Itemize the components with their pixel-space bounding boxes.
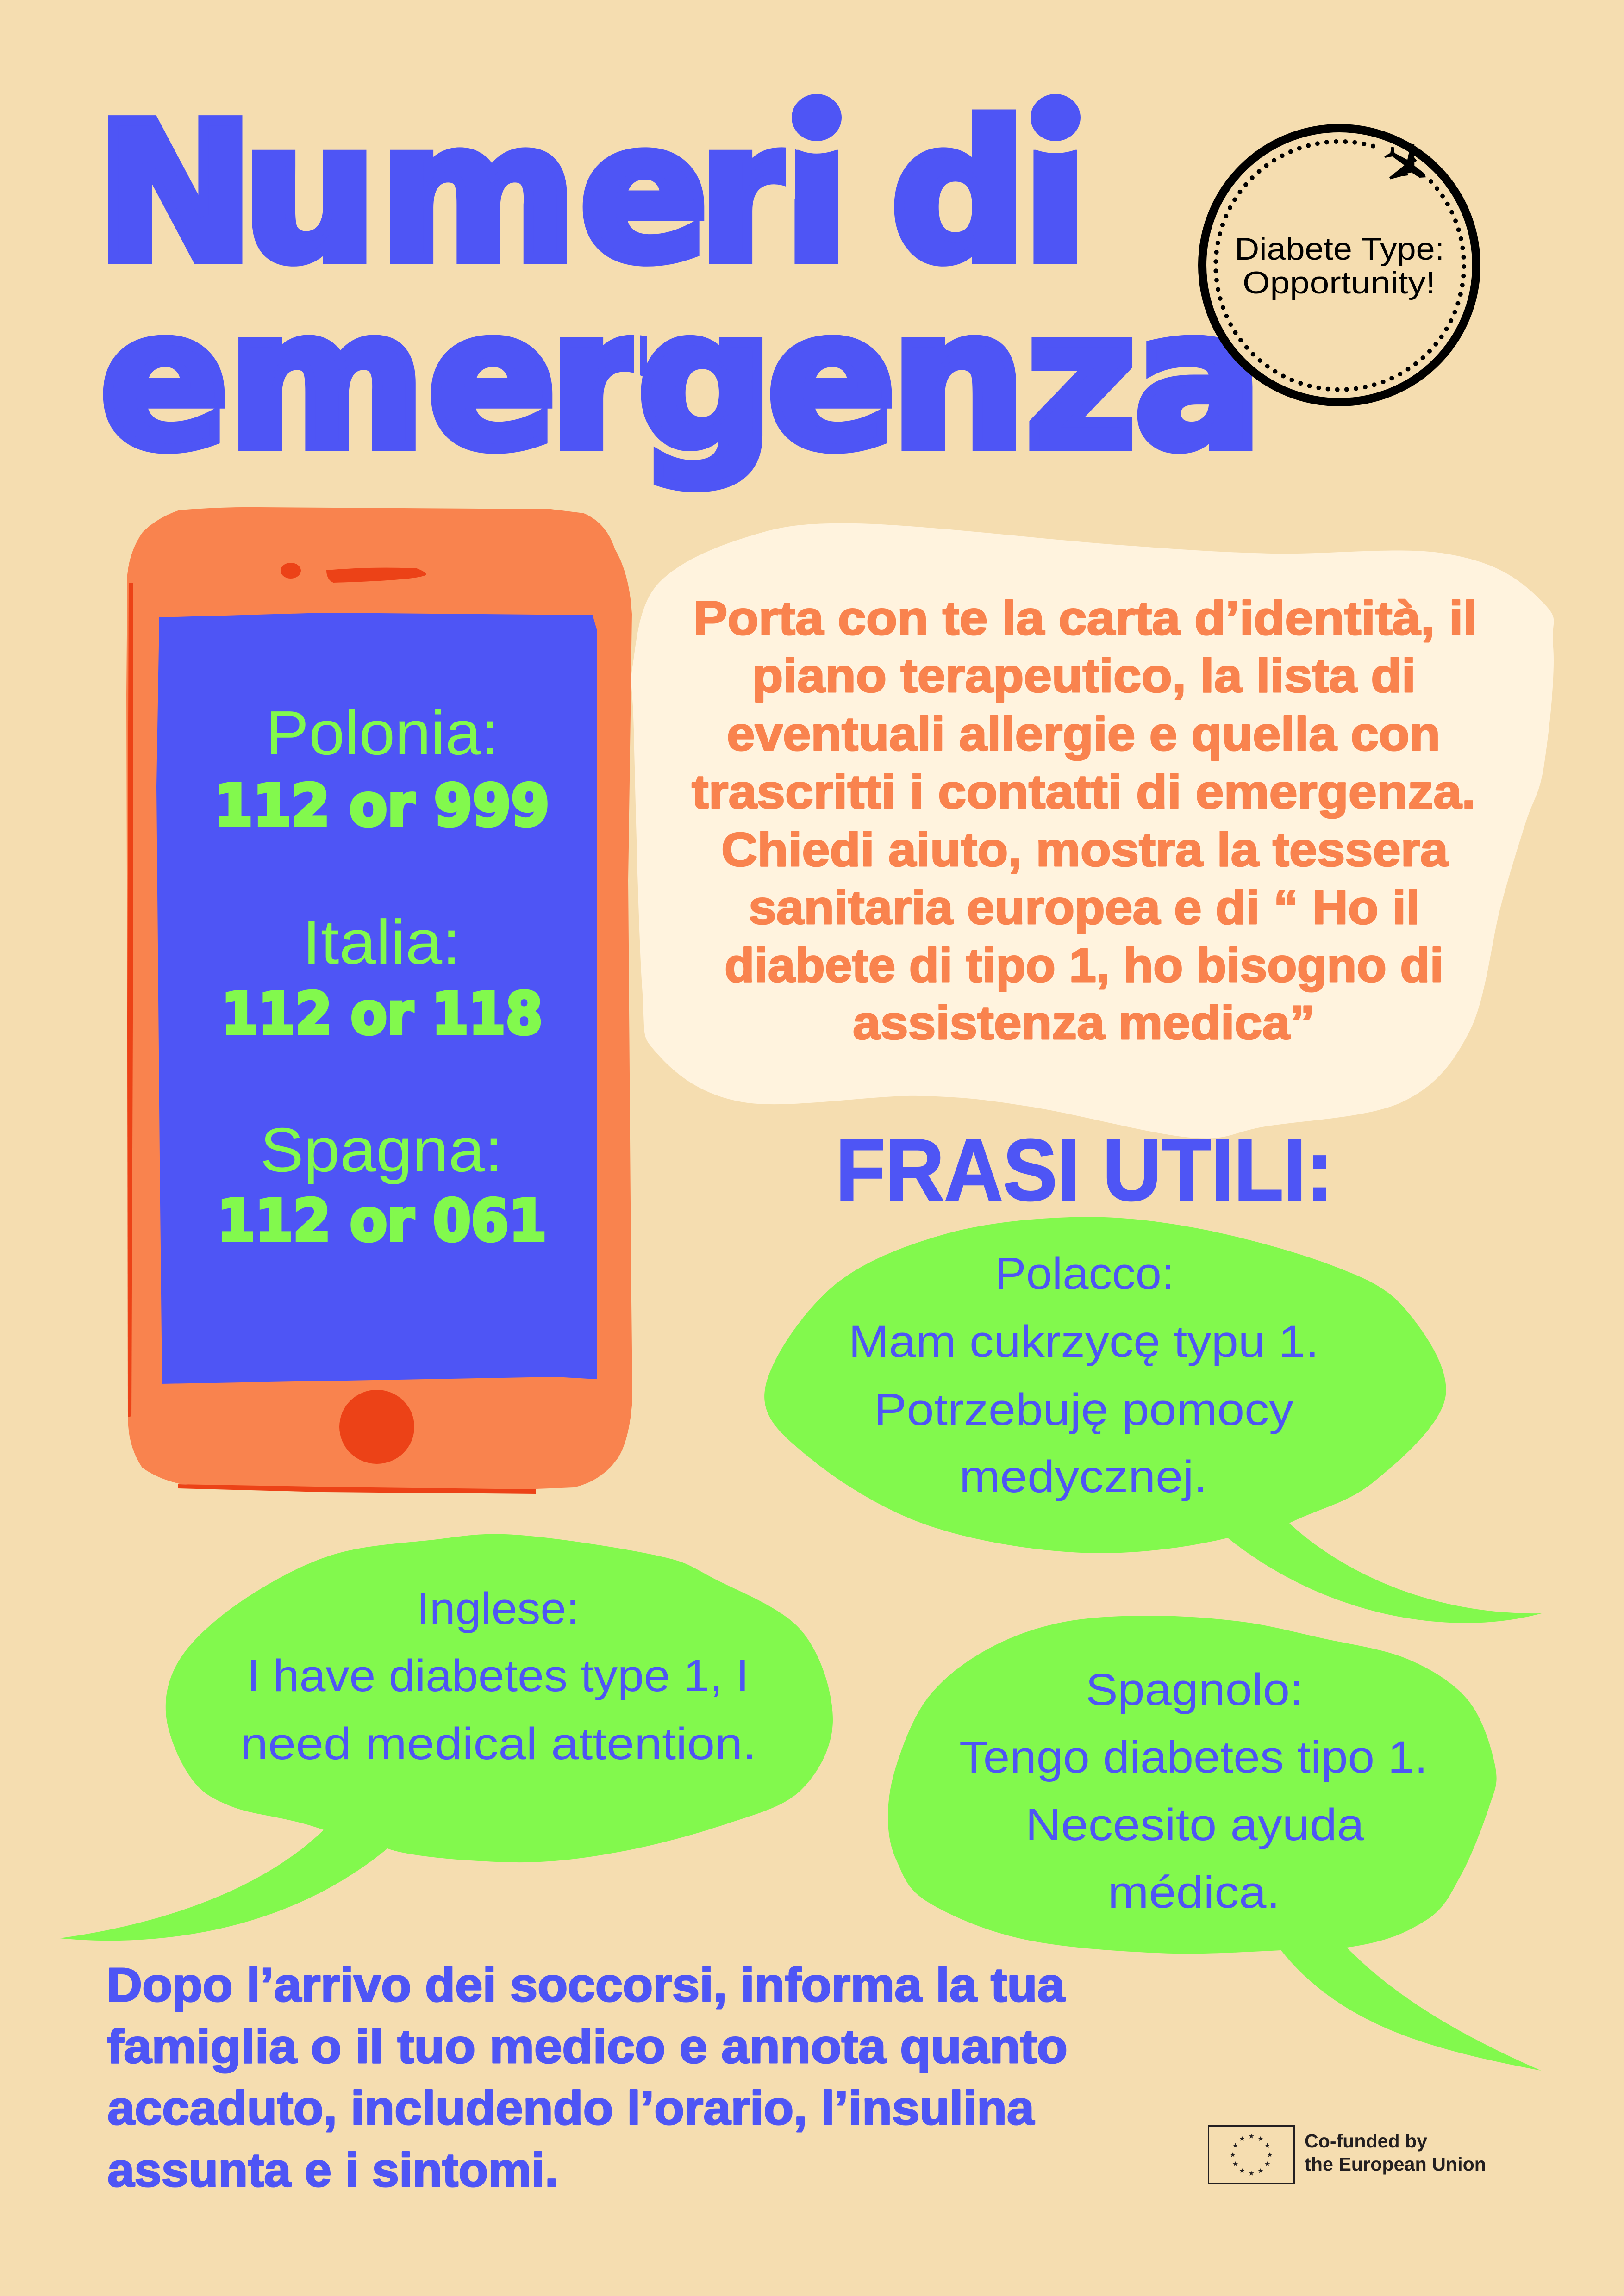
badge text	[1235, 231, 1444, 300]
Inglese text: I have diabetes type 1, I	[247, 1650, 749, 1701]
icon: airplane	[1384, 144, 1426, 179]
closing text block: accaduto, includendo l’orario, l’insulina	[107, 2081, 1035, 2134]
advice text: piano terapeutico, la lista di	[752, 649, 1416, 702]
phone screen	[156, 613, 597, 1384]
icon: EU flag	[1208, 2126, 1294, 2184]
Polacco text: Mam cukrzycę typu 1.	[849, 1316, 1319, 1367]
Spagnolo text: Spagnolo:	[1086, 1664, 1303, 1715]
Polacco text: Polacco:	[995, 1248, 1174, 1299]
Spagnolo text	[959, 1664, 1428, 1917]
speech bubble: Spagnolo	[888, 1616, 1541, 2071]
closing text block	[106, 1958, 1068, 2196]
badge text: Opportunity!	[1243, 265, 1436, 300]
advice text: trascritti i contatti di emergenza.	[692, 765, 1476, 818]
panel: cream advice blob	[631, 523, 1554, 1139]
heading: FRASI UTILI: FRASI UTILI:	[836, 1121, 1333, 1219]
logo: EU co-funding	[1208, 2126, 1486, 2184]
phone with emergency numbers	[126, 507, 632, 1494]
Spagnolo text: médica.	[1108, 1867, 1280, 1917]
Polonia numbers	[214, 698, 550, 839]
Italia numbers: Italia:	[302, 907, 461, 977]
closing text block: Dopo l’arrivo dei soccorsi, informa la tua	[106, 1958, 1065, 2011]
Polacco text: Potrzebuję pomocy	[874, 1384, 1294, 1435]
Polonia numbers: 112 or 999	[214, 772, 550, 839]
Spagnolo text: Necesito ayuda	[1025, 1799, 1364, 1850]
closing text block: assunta e i sintomi.	[107, 2143, 558, 2196]
Inglese text: need medical attention.	[240, 1718, 756, 1769]
EU text: Co-funded by	[1305, 2130, 1427, 2152]
phone speaker	[326, 568, 426, 583]
Polacco text: medycznej.	[959, 1451, 1207, 1502]
advice text: sanitaria europea e di “ Ho il	[749, 881, 1420, 934]
Inglese text: Inglese:	[417, 1583, 579, 1634]
title: Numeri di	[96, 82, 1088, 304]
advice text: Chiedi aiuto, mostra la tessera	[721, 823, 1449, 876]
advice text: eventuali allergie e quella con	[727, 707, 1440, 760]
closing text block: famiglia o il tuo medico e annota quanto	[107, 2020, 1068, 2073]
badge: Diabete Type Opportunity	[1202, 128, 1476, 402]
phone home button	[339, 1390, 414, 1464]
title: emergenza	[100, 270, 1262, 491]
Polonia numbers: Polonia:	[266, 698, 499, 768]
phone camera	[281, 563, 301, 579]
EU text: the European Union	[1305, 2153, 1486, 2175]
advice text: Porta con te la carta d’identità, il	[693, 591, 1477, 645]
Spagnolo text: Tengo diabetes tipo 1.	[959, 1732, 1428, 1782]
title	[96, 82, 1262, 491]
Italia numbers: 112 or 118	[221, 981, 543, 1047]
advice text: diabete di tipo 1, ho bisogno di	[725, 939, 1443, 992]
Spagna numbers: 112 or 061	[217, 1188, 547, 1254]
Spagna numbers	[217, 1115, 547, 1254]
EU text	[1305, 2130, 1486, 2175]
Spagna numbers: Spagna:	[260, 1115, 503, 1185]
Italia numbers	[221, 907, 543, 1047]
Inglese text	[240, 1583, 756, 1769]
speech bubble: Inglese	[60, 1534, 833, 1941]
advice text: assistenza medica”	[853, 996, 1315, 1049]
speech bubble: Polacco	[764, 1217, 1542, 1623]
advice text	[692, 591, 1477, 1049]
badge text: Diabete Type:	[1235, 231, 1444, 267]
phone body	[126, 507, 632, 1492]
Polacco text	[849, 1248, 1319, 1502]
